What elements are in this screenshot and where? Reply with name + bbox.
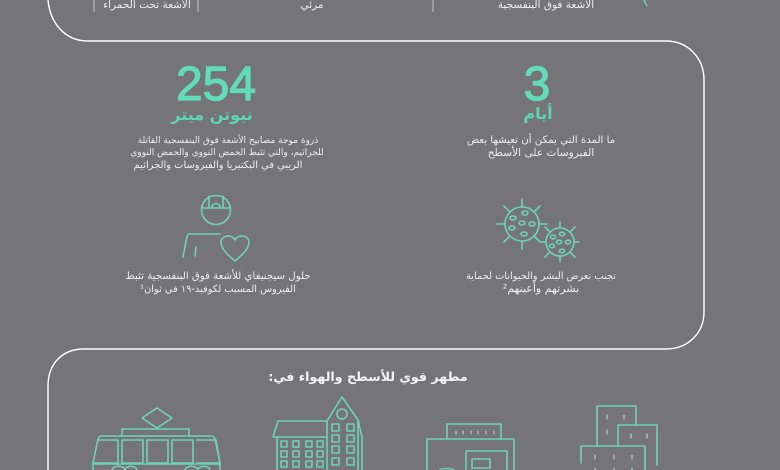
stat: 254 newton metre: للجراثيم، والتي تثبط الحمض النووي والحمض النووي (130, 148, 324, 158)
stat: 3 days: الفيروسات على الأسطح (488, 146, 594, 159)
icon: viruses (497, 199, 579, 262)
heading: strong disinfectant: مطهر قوي للأسطح والهواء في: (268, 369, 468, 384)
stat: 254 newton metre: ذروة موجة مصابيح الأشعة فوق البنفسجية القاتلة (138, 134, 318, 146)
stat: 254 newton metre: نيوتن ميتر (170, 105, 253, 124)
icon: office room (427, 424, 514, 470)
icon: worker with heart (183, 196, 249, 261)
icon: tram (93, 408, 220, 470)
stat: 3 days: 3 (524, 58, 550, 111)
text: Signify solution (125, 269, 311, 295)
spectrum labels row (94, 0, 647, 12)
text: Signify solution: الفيروس المسبب لكوفيد-١٩ في ثوان¹ (140, 284, 296, 295)
stat: 3 days: أيام (523, 103, 553, 123)
text: Signify solution: حلول سيجنيفاي للأشعة فوق البنفسجية تثبط (125, 269, 311, 282)
text: protection warning: بشرتهم وأعينهم² (503, 281, 579, 295)
stat: 3 days (467, 58, 615, 159)
text: protection warning: تجنب تعرض البشر والحيوانات لحماية (466, 271, 616, 282)
icon: building (273, 397, 362, 470)
stat: 254 newton metre: 254 (176, 58, 256, 111)
stat: 254 newton metre (130, 58, 324, 171)
stat: 3 days: ما المدة التي يمكن أن تعيشها بعض (467, 133, 615, 146)
text: protection warning (466, 271, 616, 295)
icon: city towers (581, 406, 657, 470)
stat: 254 newton metre: الريبي في البكتيريا والفيروسات والجراثيم (134, 160, 302, 171)
